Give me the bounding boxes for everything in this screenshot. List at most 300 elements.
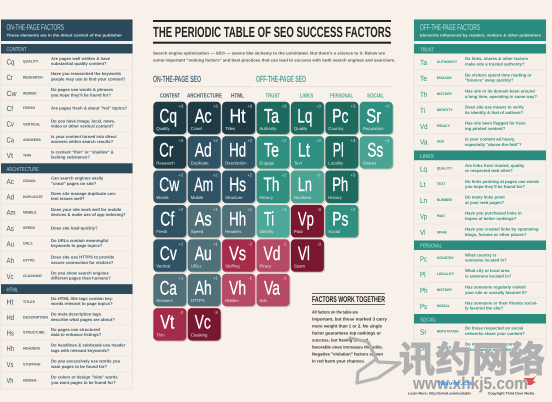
factor row: Cr: people may use to find your content? [51,77,126,82]
tile: Cv: Cv [160,243,177,265]
tile: Vh: Hidden [225,298,239,303]
factor row: Ta: Do links, shares & other factors [465,56,529,61]
factor row: Cv: video or other vertical content? [51,124,114,128]
factor row: Ca [6,134,117,145]
factor row: Ta: AUTHORITY [437,60,458,64]
tile: Ca: Answers [156,298,173,303]
panel header: on-the-page factors: These elements are in the direct control of the publisher [6,34,123,38]
factor row: Ca: Ca [6,136,15,145]
tile: Te: +2 [282,138,287,143]
section bar: links [414,150,546,160]
tile: Lt: Lt [298,140,310,162]
factor row: Th: a long time, operating in same way? [465,94,537,99]
factor row: Lq: QUALITY [437,166,453,170]
tile: Va: Va [264,277,280,299]
tile: Ph: History [328,195,343,200]
factor row: Vl: Vl [420,228,426,237]
factor row: Ps: Ps [420,302,427,311]
tile: Sr: Sr [366,105,382,127]
factor row: Hh: tags with relevant keywords? [51,348,110,353]
factor row: Lt: you hope they'll be found for? [465,184,525,189]
tile: Vd [256,239,290,273]
tile: Te: Te [264,140,279,162]
factor row: Cf: Are pages fresh & about "hot" topics? [51,105,128,110]
factor row: Te [420,72,532,83]
tile: Ps [325,205,359,238]
factor row: Th: HISTORY [437,92,453,96]
factor row: Vs: STUFFING [23,362,41,366]
tile: Ac: +3 [213,104,218,109]
factor row: Pc: COUNTRY [437,256,455,260]
factor row: Va [420,136,522,147]
factor row: Cw: WORDS [23,92,37,96]
tile: Ta: +3 [282,104,287,109]
tile: Am: Am [194,174,213,196]
factor row: Ad: tent issues well? [51,196,85,201]
tile: Ah: +1 [213,276,218,281]
tile: Ah [188,274,222,307]
tile: Cw: Cw [159,174,180,196]
factor row: Cv [6,118,115,128]
factor row: Lq: Lq [420,164,427,174]
factor row: Pl [420,268,512,279]
tile: Pl: Locality [328,160,344,165]
factor row: Th: Has site or its domain been around [465,89,535,94]
section bar: social [414,314,546,324]
factor row: Ah: Does site use HTTPS to provide [51,254,115,260]
factor row: Cf: FRESH [23,106,35,110]
tile: Hh: Hh [229,208,246,230]
factor row: Ca: Is your content turned into direct [51,134,117,139]
factor row: Ad: DUPLICATE [23,195,43,199]
callout: factors work together: favorable ones increases the odds. [312,344,383,349]
factor row: Ht: TITLES [23,300,36,304]
tile: Vp: -3 [317,207,322,212]
tile: Cf [153,205,187,238]
factor row: Vh: Vh [6,376,14,385]
tile: Vl [291,239,325,273]
factor row: Vd [420,120,527,131]
intro text: some important "ranking factors" and best practices that can lead to success with both search engines and searchers. [153,58,396,63]
tile: Va: Ads [260,298,267,303]
factor row: Cw: you hope they'll be found for? [51,92,111,98]
tile: Hs: Hs [229,174,246,196]
callout: factors work together: success, but having several [312,337,368,342]
tile: Vh [222,274,256,307]
tile: Cv [153,239,187,273]
callout: factors work together: factor guarantees top rankings or [312,330,381,335]
factor row: Pc: someone located in? [465,258,507,263]
factor row: Ah: HTTPS [23,258,35,262]
factor row: Lq [420,163,525,174]
tile: Pl: +3 [351,138,356,143]
factor row: Th [420,89,537,99]
factor row: Ti: Does site use means to verify [465,104,525,110]
tile: Cf: Fresh [156,229,168,234]
tile: Ca: Ca [160,277,177,299]
factor row: Vs: Do you excessively use words you [51,358,121,364]
factor row: Vd: Has site been flagged for host- [465,120,527,126]
tile: Vt: -2 [180,310,184,315]
section bar: html [1,284,132,294]
tile: As: +1 [213,207,218,212]
title: THE PERIODIC TABLE OF SEO SUCCESS FACTORS [153,25,391,41]
factor row: Am [6,207,126,217]
factor row: Ti: Ti [420,106,425,115]
factor row: Au: keywords to page topics? [51,243,103,248]
factor row: Pl: is someone located in? [465,274,512,278]
factor row: Vp: hopes of better rankings? [465,216,517,221]
tile: Lt: Text [294,160,303,165]
factor row: Hh: Hh [6,344,14,353]
callout: factors work together: FACTORS WORK TOGETHER [312,294,385,304]
factor row: Sr: Do those respected on social [465,326,523,331]
factor row: Ac [6,176,104,186]
column headings [160,92,384,99]
panel header: on-the-page factors: ON-THE-PAGE FACTORS [6,22,64,32]
tile: Ln: Numbers [294,195,311,200]
tile: Au: URLs [191,264,201,269]
tile: Ad: Duplicate [191,160,209,165]
tile: Pc: Country [328,126,344,131]
watermark text: 讯约网络 [399,331,545,383]
factor row: Cw: Cw [6,89,17,98]
factor row: As: As [6,224,14,233]
factor row: Hd: Do meta description tags [51,312,102,316]
tile: Va: -1 [283,276,287,281]
factor row: Va: ADS [437,140,445,144]
factor row: Lt [420,179,540,189]
tile: Cw: Words [156,195,169,200]
tile: Cr: Cr [159,140,174,162]
tile: Sr [360,102,394,135]
tile: Hh: +1 [247,207,253,212]
factor row: Sr: REPUTATION [437,330,459,334]
factor row: Vc: CLOAKING [23,274,42,278]
tile: Ti: Ti [264,208,274,230]
factor row: Au: URLS [23,242,33,246]
tile: Hd: Hd [229,140,246,162]
factor row: Vc: different pages than humans? [51,276,111,281]
tile: Hh: Headers [225,229,241,234]
factor row: Ta: Ta [420,58,428,67]
section bar: personal [414,240,546,250]
factor row: Vp [420,210,522,221]
watermark logo [350,338,400,383]
tile: Ad: Ad [195,140,212,162]
factor row: Vl: SPAM [437,230,447,234]
tile: Ht: Titles [225,126,235,131]
tile: Ta: Authority [260,126,277,131]
tile: Ph [325,170,359,204]
factor row: Vs: want pages to be found for? [50,364,108,369]
tile: Ht: Ht [230,105,246,127]
factor row: Pc: What country is [465,252,497,258]
tile: Te: Engage [260,160,275,165]
intro text: Search engine optimization — SEO — seems like alchemy to the uninitiated. But there's a science to it. Below are [153,51,386,56]
section bar: architecture [1,163,132,173]
tile: Lq: +3 [316,104,322,109]
tile: Cw: +2 [179,172,184,178]
factor row: Ph: your site or socially favored it? [465,290,527,295]
periodic table grid [153,102,394,342]
tile: Lt [291,136,325,170]
tile: Lq: Lq [297,105,312,127]
factor row: Lq: Are links from trusted, quality [465,163,525,168]
tile: Ah: HTTPS [191,298,205,303]
tile: Ss: Shares [363,160,376,165]
factor row: Ph: HISTORY [437,288,453,292]
tile: Sr: +2 [385,104,390,109]
heading: off-the-page seo [256,74,392,87]
tile: Vc: -3 [214,310,218,315]
section bar: architecture: ARCHITECTURE [6,167,39,173]
factor row: Hs [6,327,102,338]
factor row: Lq: or respected web sites? [465,168,513,173]
factor row: Ss: SHARES [437,346,452,350]
tile: Va [256,274,290,307]
panel header: off-the-page factors: OFF-THE-PAGE FACTORS [420,22,480,32]
factor row: Cq: Are pages well written & have [51,56,111,61]
factor row: Hs: Do pages use structured [51,327,101,332]
factor row: Th: Th [420,90,428,99]
factor row: Ac: Ac [6,177,14,186]
factor row: Au: Do URLs contain meaningful [51,238,108,243]
factor row: Pl: What city or local area [465,268,510,273]
tile: Vs: Vs [229,243,246,265]
panel: on-the-page factors [1,20,132,389]
factor row: Hh: HEADERS [23,346,41,350]
tile: Ah: Ah [195,277,212,299]
factor row: Va: Is your content ad heavy, [465,136,515,142]
tile: Te [256,136,290,170]
tile: Vt: Thin [156,332,165,337]
factor row: Ps: Has someone or their friends social- [465,300,538,306]
factor row: Vh: Do colors or design "hide" words [51,374,118,380]
factor row: Va: Va [420,138,428,146]
tile: Cf: Cf [160,208,175,230]
tile: Ac: Crawl [191,126,202,131]
callout: factors work together [312,293,388,363]
factor row: Hd [6,312,115,322]
tile: Pc: Pc [332,105,348,127]
section bar: links: LINKS [420,154,434,160]
watermark text: www.xhkj5.com [412,374,528,393]
tile: Vs [222,239,256,273]
factor row: Cf: Cf [6,104,14,113]
tile: Lq [291,102,325,135]
factor row: Pc: Pc [420,254,427,264]
factor row: Vd: Vd [420,122,428,131]
tile: As: Speed [191,229,204,234]
factor row: Hd: Hd [6,313,14,322]
tile: Ta [256,102,290,135]
panel header: on-the-page factors [1,20,132,41]
factor row: Ad [6,191,117,202]
tile: Hs: Structure [225,195,243,200]
factor row: Lt: Do links pointing at pages use words [465,179,540,184]
factor row: Ah [6,254,115,265]
tile: Hd: Description [225,160,247,165]
section bar: social: SOCIAL [420,317,436,323]
factor row: Ps [420,300,538,311]
factor row: Vc [6,270,111,281]
factor row: Vt: Vt [6,151,14,160]
factor row: Vt: Is content "thin" or "shallow" & [51,150,114,154]
factor row: Ca: ANSWERS [23,138,42,142]
factor row: Hs: STRUCTURE [23,331,45,335]
tile: Am: Mobile [191,195,204,200]
section bar: content [1,44,132,54]
factor row: As [6,224,98,233]
factor row: As: SPEED [23,226,35,230]
tile: Vp: Paid [294,229,303,234]
factor row: Cf [6,104,128,113]
factor row: Vp: Have you purchased links in [465,210,522,216]
factor row: Ac: Can search engines easily [51,176,104,180]
section bar: trust: TRUST [420,47,434,53]
factor row: Am: Does your site work well for mobile [51,207,122,212]
tile: Ti [256,205,290,238]
factor row: Hh: Do headlines & subheads use header [51,342,126,348]
factor row: Vp: Vp [420,212,427,221]
tile: Ht [222,102,256,135]
factor row: Cw: Do pages use words & phrases [51,87,114,92]
tile: Ti: +1 [282,207,287,212]
factor row: Pl: Pl [420,270,426,279]
callout: factors work together: more weight than 1 or 2. No single [312,323,383,328]
footer credits: Copyright Third Door Media [488,392,534,396]
tile: Hs: +2 [247,172,253,178]
factor row: Vt [6,150,114,160]
tile: Cf: +2 [179,207,184,212]
tile: Pc: +3 [351,104,356,109]
factor row: Vh [6,374,118,385]
factor row: Hs: data to enhance listings? [51,332,102,337]
factor row: Pl: LOCALITY [437,272,455,276]
factor row: Ti [420,104,525,115]
tile: Ac [188,102,222,135]
factor row: Pc [420,252,507,264]
factor row: Vl: blogs, forums or other places? [465,232,527,237]
callout: factors work together: Negative "violation" factors shown [312,351,383,356]
tile: Au: +1 [213,241,218,246]
factor row: Au: Au [6,240,14,248]
tile: Ta: Ta [264,105,279,127]
factor row: Hs: Hs [6,328,14,338]
tile: Cv: +2 [179,241,184,246]
section bar: trust [414,44,546,54]
tile: Lq: Quality [294,126,308,131]
factor row: Cv: Do you have image, local, news, [51,118,115,123]
factor row: Ah: secure connection for visitors? [51,260,114,265]
factor row: Am: MOBILE [23,210,37,214]
factor row: Vh: you want pages to be found for? [51,380,116,385]
tile: Hd [222,136,256,170]
factor row: Ad: Does site manage duplicate con- [51,191,117,196]
intro text [153,51,396,63]
panel: off-the-page factors [414,20,546,355]
factor row: Vd: PIRACY [437,124,451,128]
factor row: Ht: Ht [6,298,14,306]
factor row: Ss: Do many share your content [465,342,522,346]
tile: Vl: -3 [317,241,322,246]
footer credits: Learn More: http://selnd.com/seotable [408,392,471,396]
tile: Ti: Identity [260,229,274,234]
tile: Ac: Ac [195,105,212,127]
tile: Ln [291,170,325,204]
tile: Vh: -1 [248,276,253,281]
tile: Vc: Cloaking [191,332,208,337]
factor row: Vc: Vc [6,272,14,281]
tile: Vs: -2 [248,241,253,246]
factor row: Ht: words relevant to page topics? [50,301,113,306]
column headings: TRUST [265,92,280,99]
column headings: ARCHITECTURE [187,92,222,99]
tile: Cq: Cq [160,105,177,127]
factor row: Ln: NUMBER [437,198,453,202]
tile: Ps: +2 [351,207,356,212]
footer credits [408,376,536,396]
factor row: Vs: Vs [6,360,14,369]
tile: Am: +2 [213,172,218,178]
factor row: Ln [420,194,505,205]
tile: Cw [153,170,187,204]
tile: Cv: Vertical [156,264,170,269]
tile: Th: +2 [282,172,287,178]
factor row: Sr [420,326,525,336]
factor row: Vd: ing pirated content? [465,126,506,131]
factor row: Hd: DESCRIPTION [23,316,48,320]
tile: Ps: Ps [332,208,348,230]
tile: Pc [325,102,359,135]
factor row: Ss: across social networks? [465,347,514,352]
tile: Pl [325,136,359,170]
factor row: Ln: Do many links point [465,194,505,200]
factor row: Vc: Do you show search engines [51,270,109,276]
section bar: html: HTML [6,288,18,294]
tile: Th: Th [264,174,280,196]
tile: Ca [153,274,187,307]
factor row: Ph: Ph [420,286,428,295]
tile: Cq: +3 [179,104,184,109]
factor row: Ln: Ln [420,196,427,205]
callout: factors work together: important, but those marked 3 carry [312,316,388,321]
factor row: Vl: Have you created links by spamming [465,226,539,232]
tile: Vl: Spam [294,264,306,269]
tile: Ln: +1 [316,172,322,178]
tile: Vs: Stuffing [225,264,240,269]
tile: Ph: Ph [332,174,348,196]
factor row: Ti: IDENTITY [437,108,453,112]
factor row: Vp: PAID [437,214,445,218]
callout: factors work together: in red harm your chances. [312,358,365,363]
factor row: As: Does site load quickly? [51,225,98,230]
column headings: HTML [231,92,244,99]
column headings: CONTENT [160,92,180,99]
factor row: Cv: Cv [6,120,14,128]
factor row: Ad: Ad [6,193,14,202]
factor row: Te: "bounce" away quickly? [465,78,514,83]
factor row: Ta [420,56,529,67]
tile: Cq [153,102,187,135]
tile: Am [188,170,222,204]
tile: Vp [291,205,325,238]
tile: Vt [153,308,187,342]
panel header: off-the-page factors [414,20,546,41]
factor row: Ac: CRAWL [23,179,37,183]
tile: Vd: Vd [264,243,280,265]
